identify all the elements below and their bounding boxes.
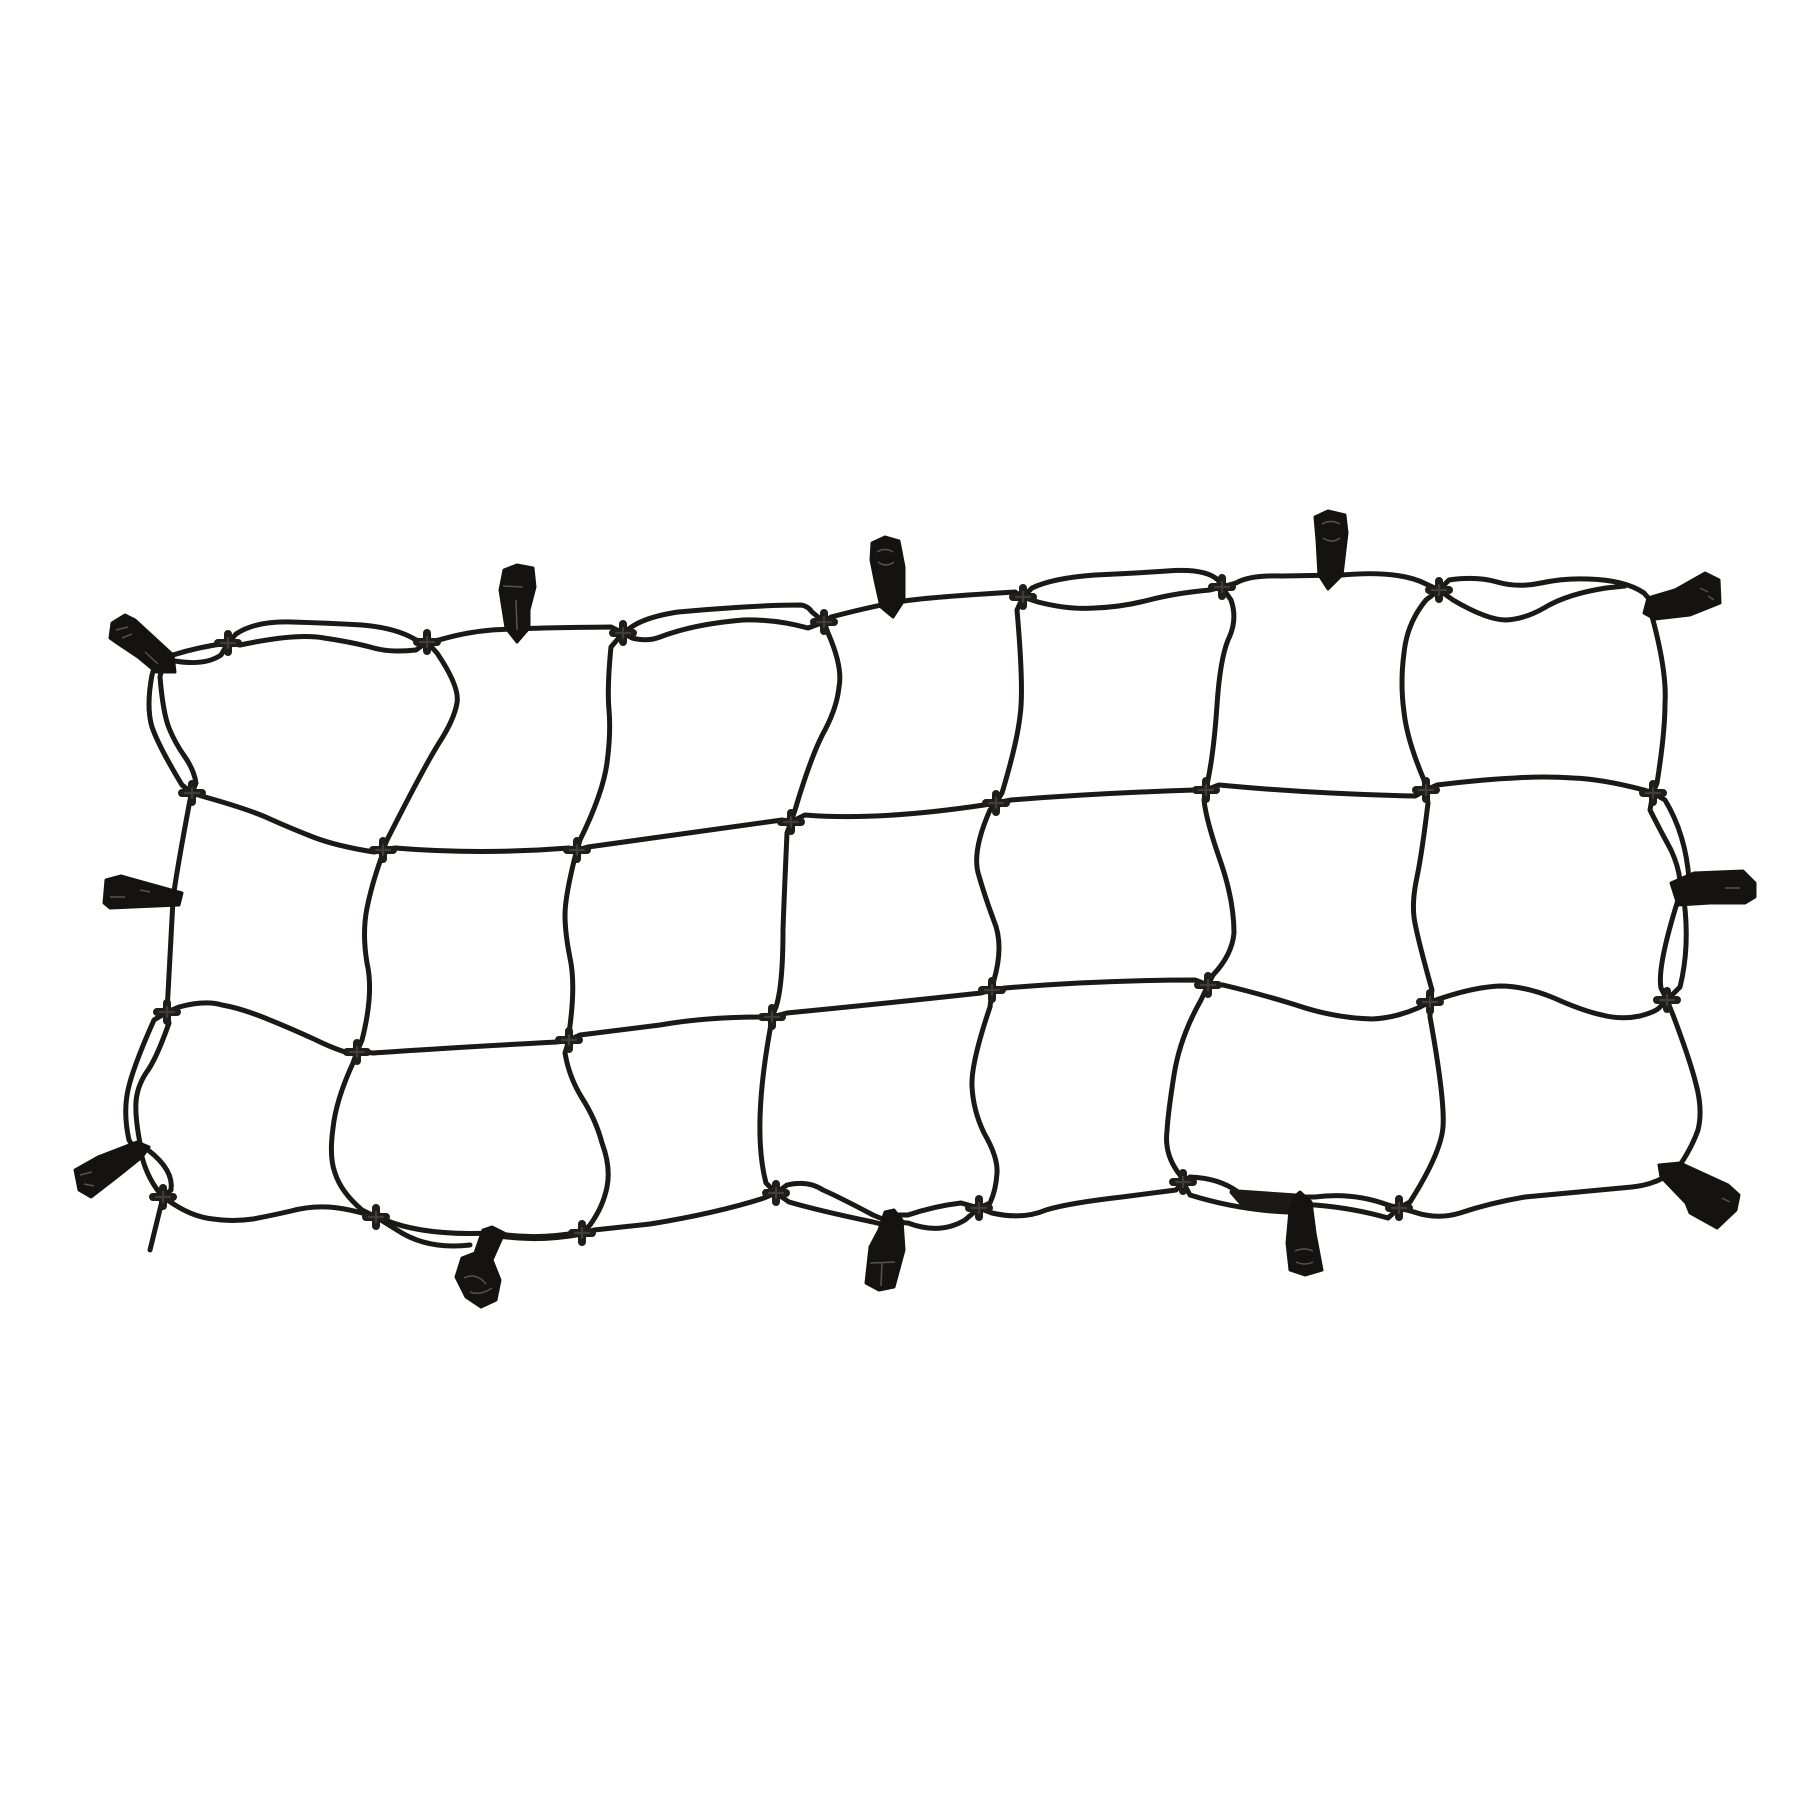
hook: bottom 3 (1287, 1192, 1322, 1275)
hook: bottom-right corner (1659, 1163, 1739, 1228)
hook: bottom 1 (456, 1227, 504, 1307)
hook: top 1 (500, 565, 535, 642)
hook: top 2 (871, 537, 904, 617)
hook: top-right corner (1644, 573, 1720, 619)
hook: top-left corner (110, 615, 175, 672)
hook: right side (1671, 871, 1755, 905)
hook: top 3 (1315, 511, 1347, 589)
hook: left side (104, 876, 182, 908)
net knots (153, 578, 1677, 1242)
net cords (126, 570, 1700, 1250)
hook: bottom-left corner (75, 1142, 149, 1197)
hook: bottom 2 (866, 1210, 904, 1290)
